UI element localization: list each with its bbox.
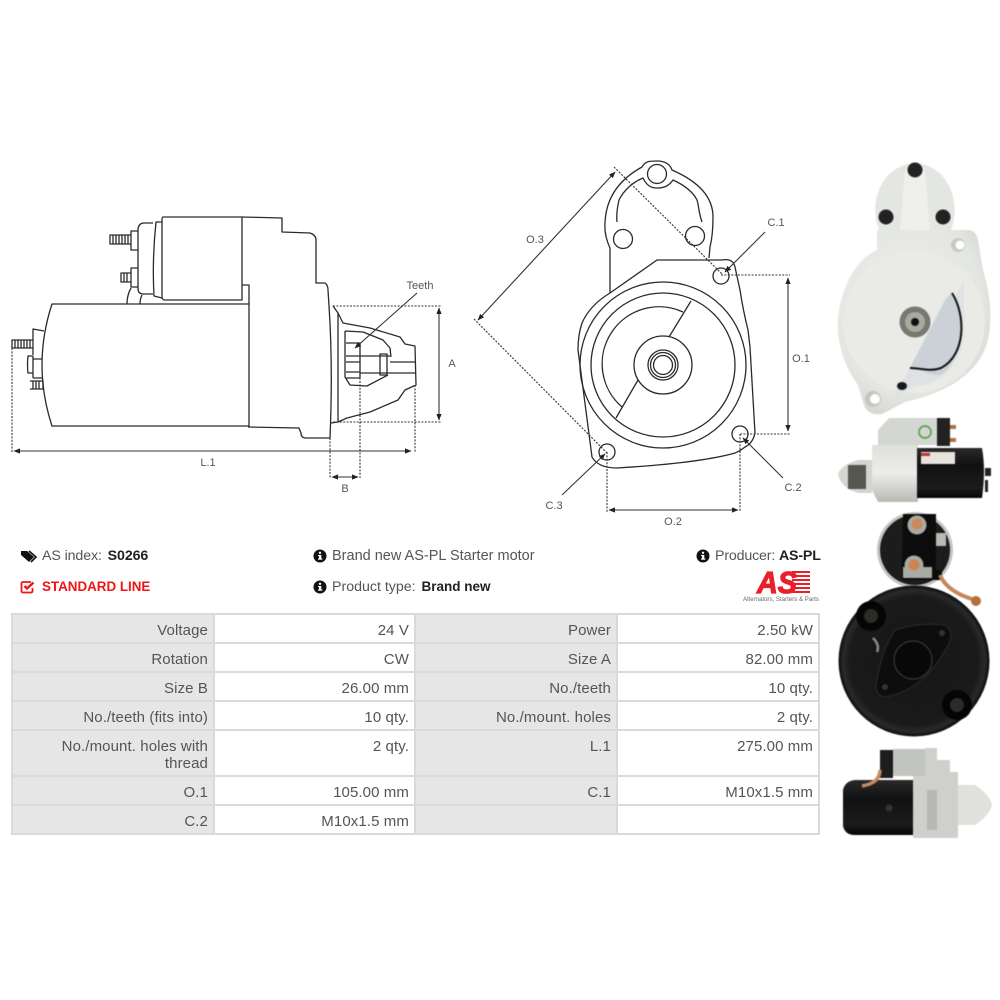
concentric rings and hub — [580, 282, 746, 448]
row: C.2: M10x1.5 mm — [321, 813, 409, 830]
row: threaded holes and L.1: L.1 — [590, 738, 611, 755]
callout C.1 — [725, 217, 785, 272]
row: size B and teeth — [13, 673, 813, 700]
nose outline — [605, 161, 713, 293]
dimension O.3 — [474, 167, 723, 453]
solenoid terminals — [110, 231, 142, 304]
specification table — [11, 613, 820, 835]
dimension A: A — [448, 358, 456, 370]
row: O.1 and C.1: M10x1.5 mm — [725, 784, 813, 801]
row: voltage and power — [13, 615, 813, 833]
standard line badge: STANDARD LINE — [42, 579, 150, 594]
row: O.1 and C.1: O.1 — [184, 784, 208, 801]
dimension A — [333, 306, 456, 422]
row: rotation and size A: Rotation — [151, 651, 208, 668]
row: rotation and size A: CW — [384, 651, 409, 668]
product description: Brand new AS-PL Starter motor — [332, 548, 535, 564]
row: size B and teeth: No./teeth — [549, 680, 611, 697]
row: voltage and power: Voltage — [157, 622, 208, 639]
product type: Product type: Brand new — [332, 579, 491, 595]
callout C.2 — [743, 438, 802, 494]
row: size B and teeth: 26.00 mm — [342, 680, 409, 697]
row: O.1 and C.1: C.1 — [587, 784, 611, 801]
row: O.1 and C.1: 105.00 mm — [333, 784, 409, 801]
row: voltage and power: 24 V — [378, 622, 409, 639]
row: teeth fits into and mount holes — [13, 702, 813, 729]
producer: Producer: AS-PL — [715, 548, 821, 564]
front view technical drawing — [474, 161, 810, 528]
callout C.2: C.2 — [784, 482, 802, 494]
row: C.2 — [13, 806, 616, 833]
row: size B and teeth: Size B — [164, 680, 208, 697]
mounting holes — [599, 268, 748, 460]
solenoid — [138, 217, 249, 304]
side view technical drawing — [12, 217, 456, 495]
dimension B: B — [341, 483, 349, 495]
logo: AS — [743, 568, 819, 603]
photo: front of starter — [838, 162, 990, 414]
dimension O.3: O.3 — [526, 234, 544, 246]
row: teeth fits into and mount holes: 2 qty. — [777, 709, 813, 726]
row: teeth fits into and mount holes: No./mount. holes — [496, 709, 611, 726]
row: threaded holes and L.1: 2 qty. — [373, 738, 409, 755]
drive housing — [163, 217, 331, 438]
photo: side view with solenoid on top — [838, 418, 991, 502]
nose holes — [614, 164, 704, 248]
dimension L.1 — [12, 348, 415, 469]
dimension O.2 — [607, 434, 740, 528]
row: threaded holes and L.1: thread — [165, 755, 208, 772]
row: voltage and power: Power — [568, 622, 611, 639]
row: threaded holes and L.1: No./mount. holes with — [62, 738, 208, 755]
row: rotation and size A: Size A — [568, 651, 611, 668]
callout C.3: C.3 — [545, 500, 563, 512]
dimension O.1: O.1 — [792, 353, 810, 365]
pinion nose — [331, 306, 416, 423]
row: O.1 and C.1 — [13, 777, 813, 804]
dimension O.2: O.2 — [664, 516, 682, 528]
row: rotation and size A — [13, 644, 813, 671]
row: C.2: C.2 — [184, 813, 208, 830]
mounting plate — [578, 260, 755, 468]
row: size B and teeth: 10 qty. — [768, 680, 813, 697]
row: voltage and power: 2.50 kW — [757, 622, 813, 639]
row: threaded holes and L.1: 275.00 mm — [737, 738, 813, 755]
teeth callout: Teeth — [407, 280, 433, 292]
row: teeth fits into and mount holes: 10 qty. — [364, 709, 409, 726]
dimension B — [330, 347, 360, 495]
row: threaded holes and L.1 — [13, 731, 813, 775]
motor body — [42, 304, 249, 426]
callout C.3 — [545, 454, 605, 512]
photo: side view mirrored — [843, 748, 992, 838]
rear terminals — [12, 329, 44, 389]
row: rotation and size A: 82.00 mm — [746, 651, 813, 668]
dimension O.1 — [721, 275, 810, 434]
photo: rear view — [838, 512, 990, 736]
dimension L.1: L.1 — [200, 457, 216, 469]
row: teeth fits into and mount holes: No./teeth (fits into) — [83, 709, 208, 726]
teeth callout — [355, 280, 433, 348]
logo: AS: Alternators, Starters & Parts — [743, 597, 819, 603]
callout C.1: C.1 — [767, 217, 785, 229]
AS index line: AS index: S0266 — [42, 548, 148, 564]
